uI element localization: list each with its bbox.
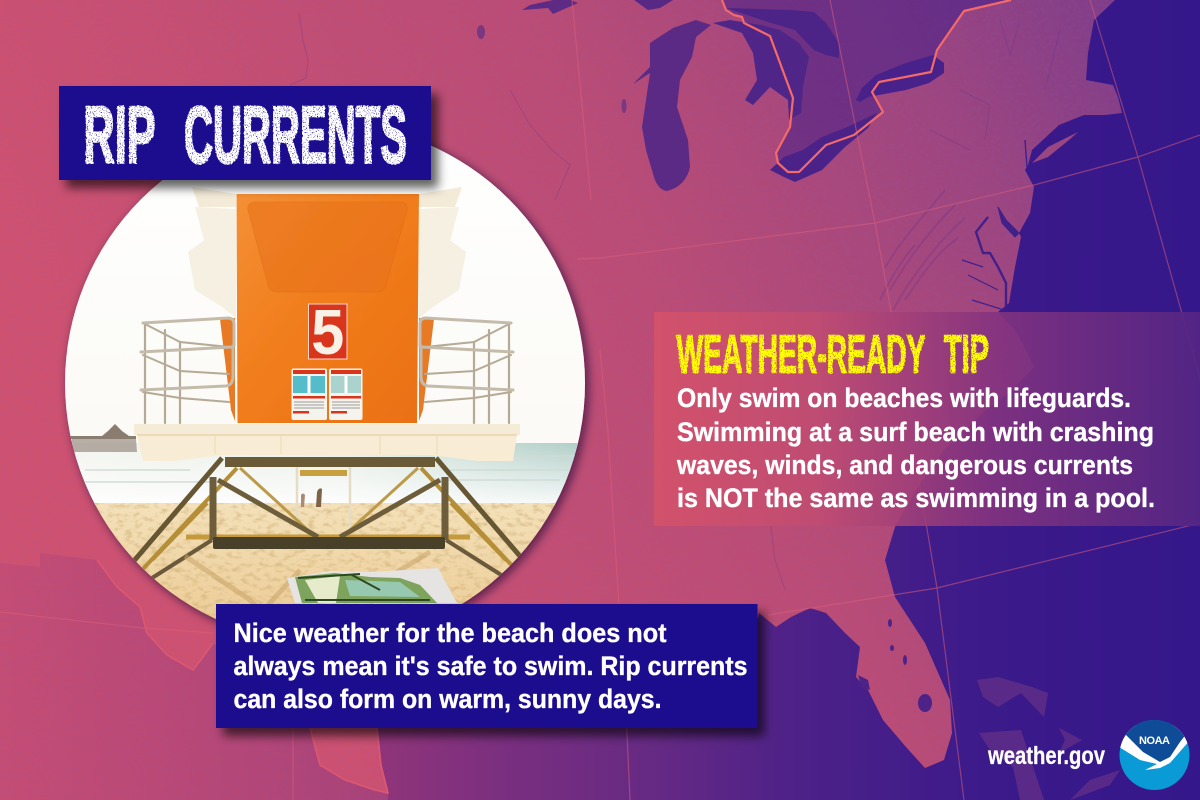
callout text: [234, 618, 748, 714]
railings: [141, 318, 513, 423]
title text: RIP: [84, 90, 156, 180]
rivers and ridges: [290, 13, 1060, 590]
panel: weather-ready tip: [654, 312, 1200, 526]
title banner: CURRENTS: [184, 90, 407, 180]
ladder and people under the tower: [297, 467, 350, 533]
number 5 sign: 5: [311, 296, 344, 368]
weather.gov link text: weather.gov: [987, 742, 1105, 770]
rip current signs: [292, 368, 362, 420]
tip body text: is NOT the same as swimming in a pool.: [677, 483, 1155, 513]
booth window recess: [248, 202, 407, 292]
tower platform: [134, 424, 520, 461]
US-Canada border line: [722, 0, 1011, 172]
Great Lakes: [477, 0, 944, 191]
tip body text: Only swim on beaches with lifeguards.: [677, 383, 1131, 413]
callout text: Nice weather for the beach does not: [234, 618, 667, 648]
icon: NOAA logo: NOAA: [1139, 735, 1170, 747]
tip body text: waves, winds, and dangerous currents: [676, 450, 1133, 480]
Canada tint: [722, 0, 1011, 172]
tip body text: [676, 383, 1155, 513]
shadows on sand: [185, 552, 430, 612]
callout text: always mean it's safe to swim. Rip currents: [234, 651, 748, 681]
tip body text: Swimming at a surf beach with crashing: [677, 417, 1154, 447]
sand: [94, 500, 562, 628]
tip heading: TIP: [944, 324, 989, 384]
Atlantic Ocean and Gulf of Mexico: [377, 0, 1200, 800]
tower roof wings: [192, 187, 462, 207]
Florida lakes: [858, 619, 932, 712]
Long Island: [1032, 132, 1078, 163]
tip heading: WEATHER-READY: [676, 324, 926, 384]
tip heading: [676, 324, 989, 384]
callout: nice weather note: [216, 604, 758, 728]
sky: [60, 120, 590, 445]
panel: lifeguard tower photo circle: [60, 120, 590, 648]
title text: [84, 90, 407, 180]
tower steel frame: [133, 457, 525, 578]
title banner: [59, 86, 431, 180]
Delaware Bay and Chesapeake Bay: [962, 140, 1027, 310]
sea: [60, 443, 590, 505]
icon: NOAA logo: [1120, 720, 1190, 790]
pier: [70, 424, 137, 452]
orange booth: [236, 194, 419, 423]
Mexico tint: [0, 553, 388, 800]
beach towel: [287, 568, 457, 603]
orange side panels: [220, 318, 235, 421]
callout text: can also form on warm, sunny days.: [234, 684, 662, 714]
Texas coast highlight: [97, 560, 388, 793]
Bahamas: [977, 677, 1120, 800]
